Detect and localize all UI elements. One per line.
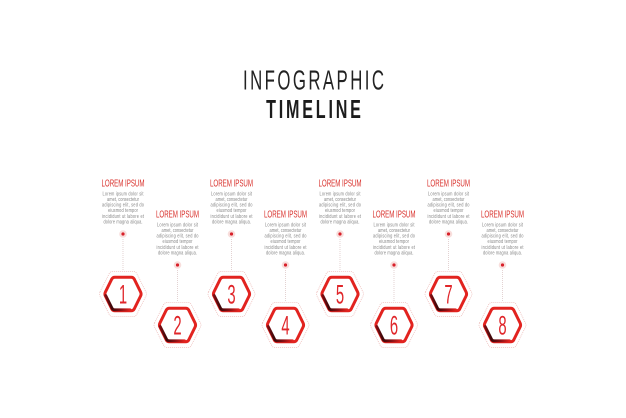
text block: incididunt ut labore et [211,213,253,220]
marker dot [390,261,398,269]
text block: dolore magna aliqua. [320,219,360,226]
text block: dolore magna aliqua. [483,250,522,257]
text block: amet, consectetur [324,196,356,203]
text block: amet, consectetur [270,227,302,234]
text block: Lorem ipsum dolor sit [319,191,361,198]
text block: incididunt ut labore et [373,244,416,251]
marker dot [119,230,127,238]
text block: eiusmod tempor [216,208,247,214]
text block: amet, consectetur [487,227,519,234]
step 7 [425,177,472,316]
hexagon badge: 7 [444,279,453,310]
step 5 [316,177,364,316]
text block: adipiscing elit, sed do [265,233,307,240]
text block: adipiscing elit, sed do [102,202,144,209]
heading: LOREM IPSUM [481,208,524,220]
hexagon badge: 8 [498,310,507,341]
text block [265,222,307,257]
text block: eiusmod tempor [108,208,138,214]
text block [157,222,199,257]
marker dot [499,261,506,269]
text block: incididunt ut labore et [102,213,145,220]
text block: Lorem ipsum dolor sit [482,222,524,229]
text block [428,191,470,226]
text block: adipiscing elit, sed do [482,233,524,240]
text block: Lorem ipsum dolor sit [102,191,144,198]
text block: adipiscing elit, sed do [211,202,253,209]
text block: adipiscing elit, sed do [157,233,199,240]
step 3 [208,177,255,316]
text block: amet, consectetur [162,227,194,234]
text block: incididunt ut labore et [157,244,199,251]
step 2 [154,208,201,348]
title [243,64,384,124]
text block: eiusmod tempor [325,208,355,214]
marker dot [445,230,452,238]
text block: adipiscing elit, sed do [319,202,361,209]
hexagon badge: 6 [390,310,398,341]
hexagon badge: 5 [336,279,344,310]
step 1 [100,177,146,316]
text block [373,222,416,257]
text block: Lorem ipsum dolor sit [157,222,199,229]
text block: dolore magna aliqua. [212,219,251,226]
heading: LOREM IPSUM [318,177,362,189]
marker dot [336,230,344,238]
step 6 [370,208,418,348]
text block: amet, consectetur [433,196,465,203]
text block [211,191,253,226]
text block [102,191,145,226]
text block: Lorem ipsum dolor sit [265,222,307,229]
heading: LOREM IPSUM [372,208,416,220]
heading: LOREM IPSUM [210,177,253,189]
text block: Lorem ipsum dolor sit [428,191,470,198]
marker dot [282,261,289,269]
text block: amet, consectetur [107,196,139,203]
text block: dolore magna aliqua. [374,250,414,257]
step 4 [262,208,309,348]
hexagon badge: 1 [119,279,127,310]
text block [482,222,524,257]
text block: Lorem ipsum dolor sit [211,191,253,198]
text block: amet, consectetur [378,227,410,234]
heading: LOREM IPSUM [101,177,145,189]
text block: dolore magna aliqua. [429,219,468,226]
hexagon badge: 4 [281,310,290,341]
text block: adipiscing elit, sed do [428,202,470,209]
heading: LOREM IPSUM [156,208,199,220]
text block: eiusmod tempor [433,208,464,214]
text block: Lorem ipsum dolor sit [373,222,415,229]
text block: dolore magna aliqua. [103,219,143,226]
text block: incididunt ut labore et [428,213,470,220]
text block: incididunt ut labore et [265,244,307,251]
text block: dolore magna aliqua. [158,250,197,257]
text block: incididunt ut labore et [482,244,524,251]
title line 2: TIMELINE [266,94,361,124]
text block [319,191,362,226]
text block: dolore magna aliqua. [266,250,305,257]
text block: eiusmod tempor [270,239,301,245]
step 8 [479,208,526,348]
hexagon badge: 3 [227,279,236,310]
text block: adipiscing elit, sed do [373,233,415,240]
heading: LOREM IPSUM [427,177,470,189]
text block: eiusmod tempor [379,239,409,245]
text block: eiusmod tempor [487,239,518,245]
text block: eiusmod tempor [162,239,193,245]
heading: LOREM IPSUM [264,208,307,220]
text block: amet, consectetur [216,196,248,203]
title line 1: INFOGRAPHIC [243,64,384,96]
text block: incididunt ut labore et [319,213,362,220]
marker dot [174,261,181,269]
hexagon badge: 2 [173,310,182,341]
marker dot [228,230,235,238]
